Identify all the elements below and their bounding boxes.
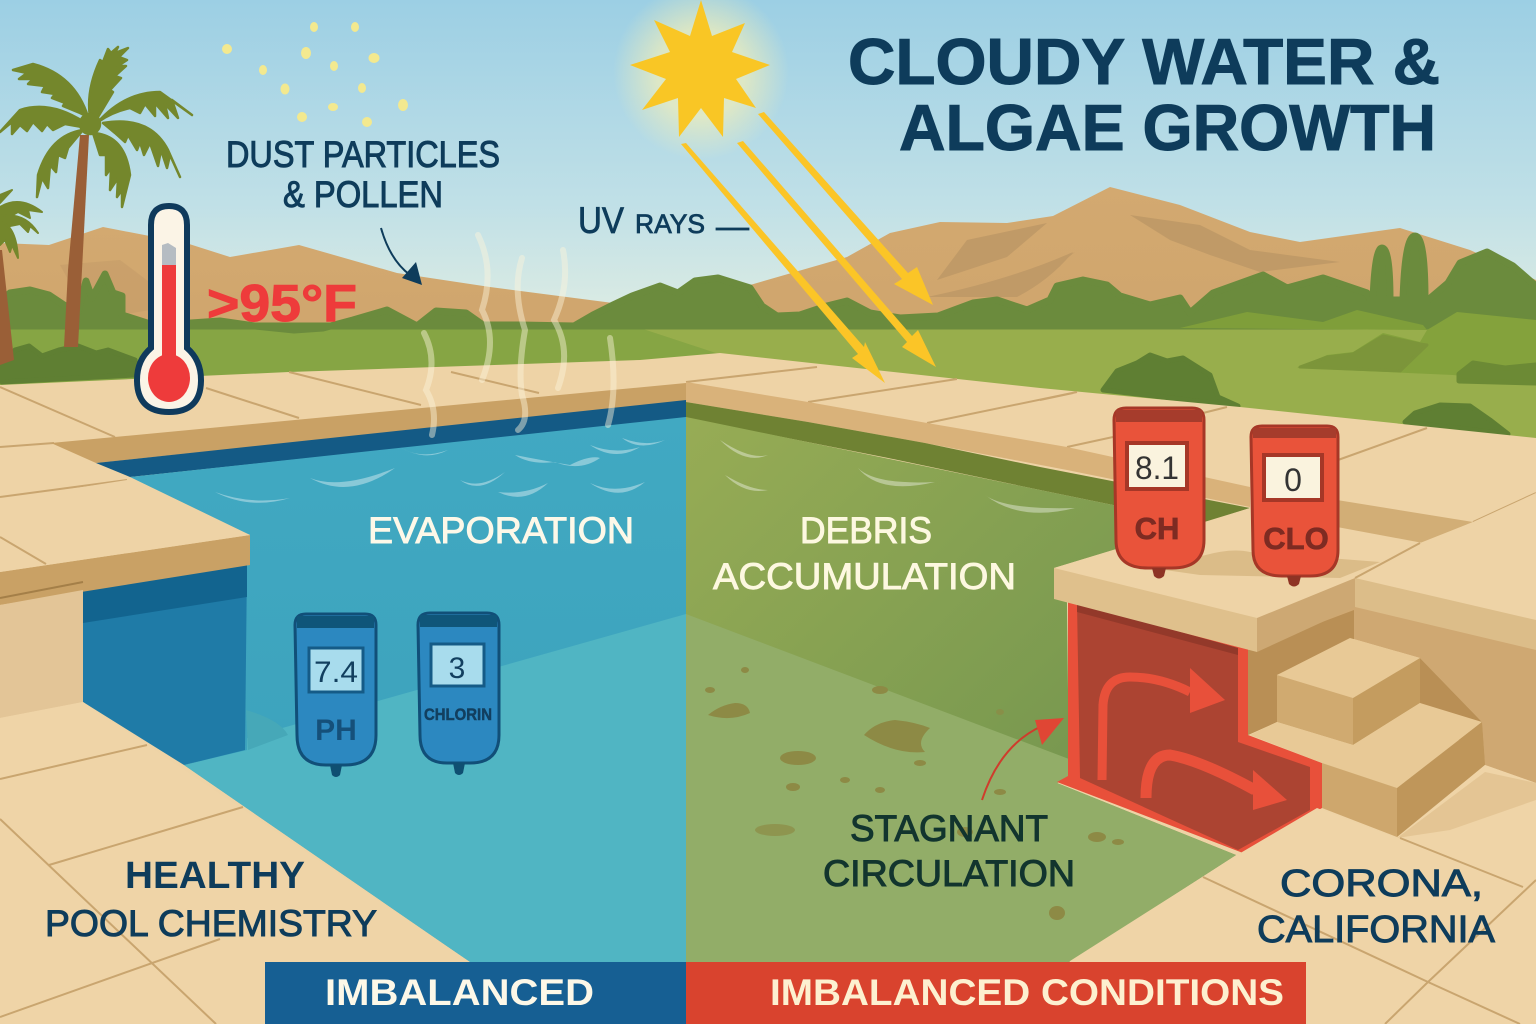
bottom left deck	[0, 702, 470, 1024]
label: UV rays	[578, 200, 749, 241]
banner: imbalanced conditions red: IMBALANCED CONDITIONS	[770, 972, 1284, 1013]
title: ALGAE GROWTH	[899, 91, 1436, 164]
label: Corona, California: CORONA,	[1280, 863, 1483, 905]
label: stagnant circulation: STAGNANT	[850, 808, 1048, 849]
palm tree small	[0, 190, 42, 365]
label: UV rays: UV	[578, 200, 624, 241]
label: healthy pool chemistry: HEALTHY	[125, 855, 305, 897]
light green rolling hills	[1180, 310, 1536, 385]
healthy blue water	[83, 417, 686, 962]
label: dust particles and pollen: & POLLEN	[283, 174, 443, 215]
meter: CH	[1114, 408, 1204, 578]
arrow: dust pointing down	[381, 228, 422, 285]
meter: CLO: 0	[1284, 462, 1302, 498]
label: debris accumulation	[713, 510, 1016, 597]
left coping face	[51, 383, 686, 463]
label: dust particles and pollen: DUST PARTICLES	[226, 134, 500, 175]
label: evaporation: EVAPORATION	[368, 510, 634, 551]
label: stagnant circulation	[823, 808, 1075, 894]
bottom right deck	[1040, 765, 1536, 1024]
label: healthy pool chemistry: POOL CHEMISTRY	[45, 903, 377, 944]
title	[848, 25, 1440, 164]
banner: imbalanced blue: IMBALANCED	[325, 972, 594, 1013]
stagnant step wall background	[1248, 600, 1536, 783]
UV ray arrows	[681, 112, 936, 383]
label: dust particles and pollen	[226, 134, 500, 215]
heat waves rising	[424, 235, 614, 435]
stone block with meters	[1054, 508, 1420, 652]
meter: CH: CH	[1135, 511, 1179, 546]
algae green water	[686, 417, 1236, 962]
tree line	[0, 236, 1536, 330]
meter: pH: 7.4	[314, 656, 358, 689]
meter: chlorine: 3	[449, 652, 465, 685]
meter: pH: PH	[315, 714, 357, 747]
olive pool tile band	[686, 402, 1250, 523]
water ripples	[215, 438, 1075, 513]
right deck block	[1337, 493, 1536, 650]
red stagnant circulation zone	[1057, 600, 1322, 853]
meter: CLO	[1251, 426, 1338, 586]
title: CLOUDY WATER &	[848, 25, 1440, 98]
pool deck	[0, 353, 1536, 1024]
sky background	[0, 0, 1536, 340]
grass field	[0, 328, 1536, 445]
background hills	[0, 187, 1536, 340]
meter: CLO: CLO	[1263, 521, 1329, 556]
left deck corner block	[0, 480, 250, 718]
thermometer	[137, 206, 201, 412]
banner: imbalanced blue	[265, 962, 686, 1024]
label: Corona, California: CALIFORNIA	[1257, 909, 1496, 951]
foreground bushes	[2, 346, 1536, 434]
meter: CH: 8.1	[1135, 450, 1179, 486]
banner: imbalanced conditions red	[686, 962, 1306, 1024]
dust and pollen particles	[222, 22, 408, 127]
meter: chlorine	[418, 613, 499, 775]
blue pool tile band	[96, 400, 686, 477]
temperature label: >95°F	[207, 275, 357, 333]
deck grout lines	[0, 367, 1536, 522]
label: stagnant circulation: CIRCULATION	[823, 853, 1075, 894]
label: Corona, California	[1257, 863, 1496, 951]
step wall and steps	[1248, 610, 1485, 837]
label: debris accumulation: DEBRIS	[800, 510, 932, 551]
sun	[613, 0, 789, 160]
label: UV rays: RAYS	[635, 209, 705, 239]
label: healthy pool chemistry	[45, 855, 377, 944]
callout arrow: stagnant circulation	[982, 718, 1064, 800]
label: debris accumulation: ACCUMULATION	[713, 556, 1016, 597]
right coping face	[686, 382, 1250, 507]
meter: chlorine: CHLORIN	[424, 705, 492, 724]
meter: pH	[295, 614, 376, 777]
debris leaves and algae spots	[705, 667, 1124, 920]
palm tree large	[0, 47, 192, 347]
